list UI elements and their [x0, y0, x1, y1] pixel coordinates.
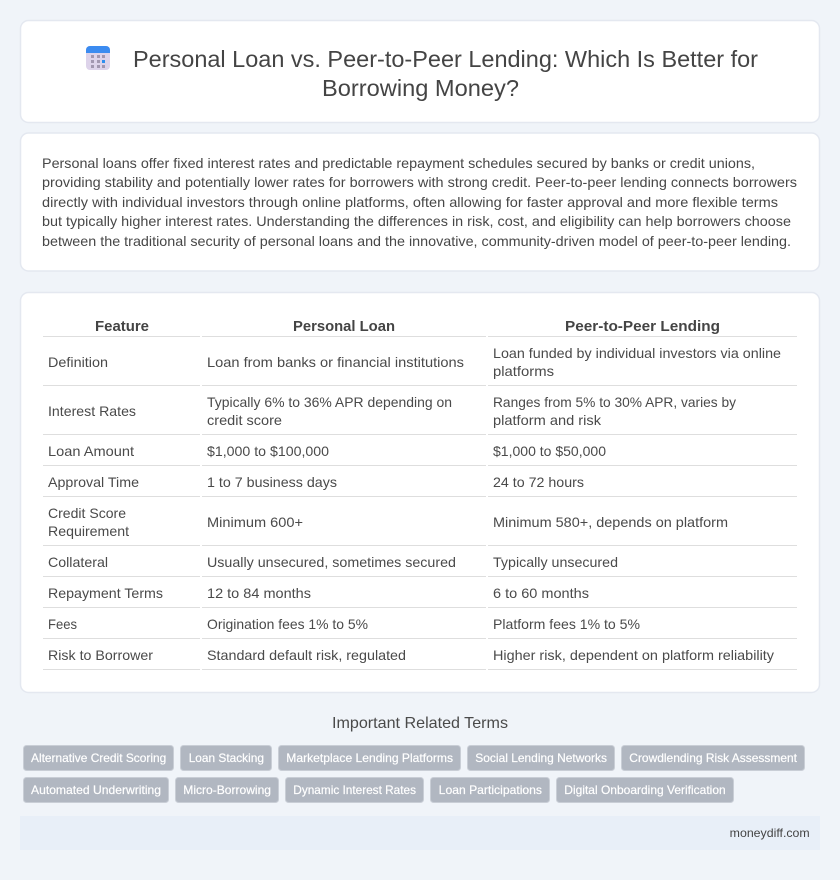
- heading: related terms: Important Related Terms: [332, 715, 508, 732]
- row: approval time: [48, 474, 584, 490]
- title: Personal Loan vs. Peer-to-Peer Lending: Which Is Better for: [133, 46, 758, 72]
- row: definition: platforms: [493, 363, 554, 379]
- row: fees: [48, 616, 640, 632]
- row: approval time: Approval Time: [48, 474, 139, 490]
- title: Borrowing Money?: [322, 75, 519, 101]
- row: definition: Definition: [48, 354, 108, 370]
- table header: [95, 318, 720, 335]
- row: repayment terms: Repayment Terms: [48, 585, 163, 601]
- row: interest rates: [48, 394, 736, 428]
- row: interest rates: credit score: [207, 412, 282, 428]
- row: repayment terms: 12 to 84 months: [207, 585, 311, 601]
- row: fees: Origination fees 1% to 5%: [207, 616, 368, 632]
- row: loan amount: $1,000 to $100,000: [207, 443, 329, 459]
- row: collateral: Typically unsecured: [493, 554, 618, 570]
- tags: related terms: Automated Underwriting: [31, 783, 161, 797]
- row: interest rates: Typically 6% to 36% APR depending on: [207, 394, 452, 410]
- tags: related terms: Loan Stacking: [189, 751, 264, 765]
- text block: introduction paragraph: [42, 155, 797, 249]
- row: repayment terms: 6 to 60 months: [493, 585, 589, 601]
- row: loan amount: $1,000 to $50,000: [493, 443, 606, 459]
- row: collateral: Collateral: [48, 554, 108, 570]
- title: [133, 46, 758, 101]
- row: collateral: [48, 554, 618, 570]
- footer: moneydiff.com: [730, 826, 810, 840]
- row: credit score requirement: [48, 505, 728, 539]
- text block: introduction paragraph: but typically higher interest rates. Understanding the differences in risk, cost, and eligibility can help borrowers choose: [42, 213, 791, 229]
- tags: related terms: Micro-Borrowing: [183, 783, 271, 797]
- tags: related terms: Marketplace Lending Platforms: [286, 751, 453, 765]
- row: fees: Platform fees 1% to 5%: [493, 616, 640, 632]
- row: credit score requirement: Requirement: [48, 523, 129, 539]
- row: definition: Loan from banks or financial institutions: [207, 354, 464, 370]
- tags: related terms: Dynamic Interest Rates: [293, 783, 416, 797]
- text block: introduction paragraph: between the traditional security of personal loans and the innovative, community-driven model of peer-to-peer lending.: [42, 233, 791, 249]
- row: risk to borrower: Standard default risk, regulated: [207, 647, 406, 663]
- panel: comparison table: [20, 292, 820, 692]
- row: risk to borrower: Higher risk, dependent on platform reliability: [493, 647, 774, 663]
- panel: introduction: [20, 133, 820, 271]
- tags: related terms: [24, 746, 804, 802]
- row: definition: Loan funded by individual investors via online: [493, 345, 781, 361]
- text block: introduction paragraph: Personal loans offer fixed interest rates and predictable repayment schedules secured by banks or credit unions,: [42, 155, 755, 171]
- tags: related terms: Loan Participations: [439, 783, 542, 797]
- icon: calendar: [86, 46, 110, 70]
- row: definition: [48, 345, 781, 379]
- footer: [20, 816, 820, 850]
- row: repayment terms: [48, 585, 589, 601]
- row: approval time: 1 to 7 business days: [207, 474, 337, 490]
- row: approval time: 24 to 72 hours: [493, 474, 584, 490]
- row: credit score requirement: Minimum 580+, depends on platform: [493, 514, 728, 530]
- table header: Peer-to-Peer Lending: [565, 318, 720, 335]
- tags: related terms: Digital Onboarding Verification: [564, 783, 726, 797]
- row: interest rates: platform and risk: [493, 412, 602, 428]
- table header: Feature: [95, 318, 149, 335]
- row: risk to borrower: [48, 647, 774, 663]
- row: fees: Fees: [48, 616, 77, 632]
- tags: related terms: Alternative Credit Scoring: [31, 751, 166, 765]
- tags: related terms: Crowdlending Risk Assessment: [629, 751, 798, 765]
- row: risk to borrower: Risk to Borrower: [48, 647, 153, 663]
- row: credit score requirement: Credit Score: [48, 505, 126, 521]
- row: interest rates: Interest Rates: [48, 403, 136, 419]
- panel: header: [20, 20, 820, 122]
- text block: introduction paragraph: directly with individual investors through online platforms, often allowing for faster approval and more flexible terms: [42, 194, 778, 210]
- table header: Personal Loan: [293, 318, 395, 335]
- row: credit score requirement: Minimum 600+: [207, 514, 303, 530]
- tags: related terms: Social Lending Networks: [475, 751, 607, 765]
- row: loan amount: [48, 443, 606, 459]
- row: loan amount: Loan Amount: [48, 443, 134, 459]
- row: interest rates: Ranges from 5% to 30% APR, varies by: [493, 394, 736, 410]
- text block: introduction paragraph: providing stability and potentially lower rates for borrowers with strong credit. Peer-to-peer lending connects borrowers: [42, 174, 797, 190]
- row: collateral: Usually unsecured, sometimes secured: [207, 554, 456, 570]
